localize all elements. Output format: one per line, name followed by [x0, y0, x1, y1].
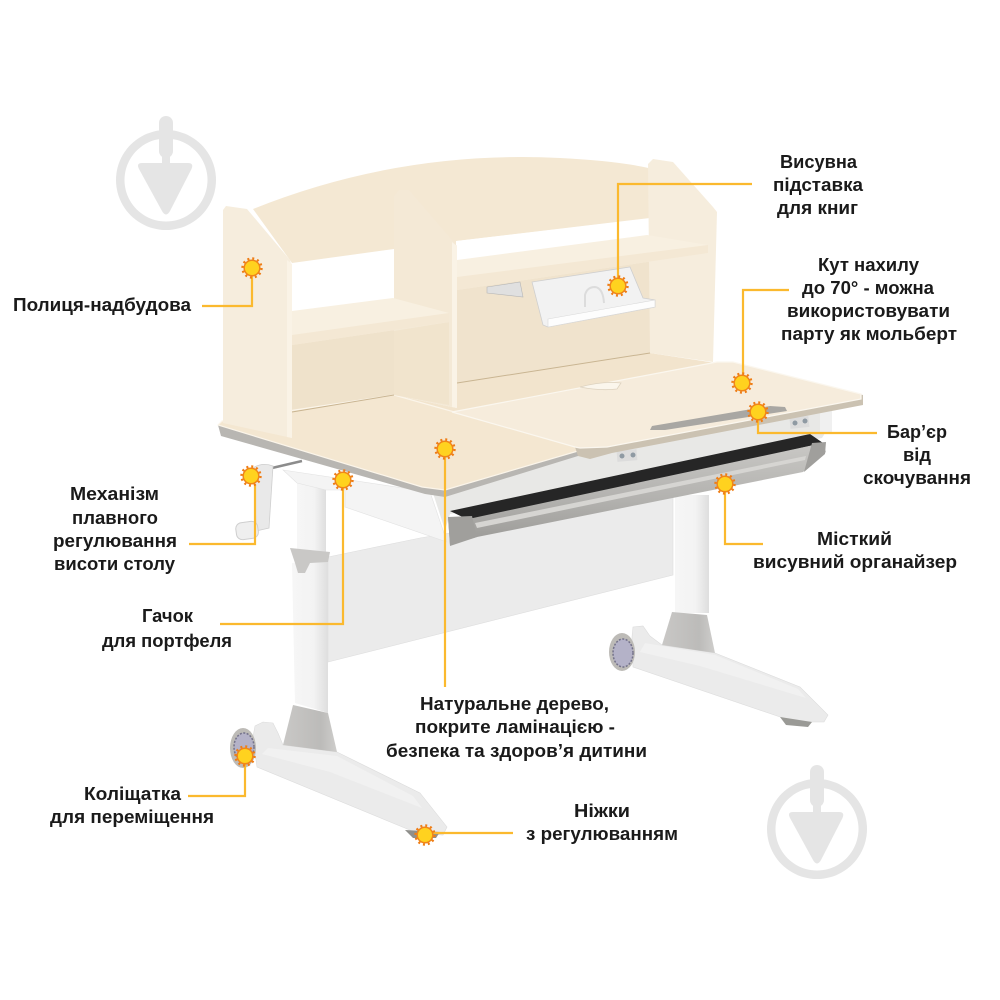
tilting board — [452, 362, 863, 459]
label: hook: для портфеля — [102, 630, 232, 651]
back gaps — [292, 249, 394, 311]
watermark: top left logo — [116, 116, 216, 230]
label: tilt angle: використовувати — [787, 300, 950, 321]
crank handle — [235, 461, 302, 540]
label: barrier — [863, 421, 971, 488]
markers — [236, 258, 768, 844]
left end panel — [223, 206, 292, 438]
desktop behind boards — [394, 353, 716, 412]
label: book stand: підставка — [773, 174, 864, 195]
label: height mechanism — [53, 483, 177, 574]
upper shelf — [457, 235, 708, 290]
left bay middle shelf — [292, 298, 449, 345]
label: natural wood — [386, 693, 647, 761]
label: book stand: Висувна — [780, 151, 858, 172]
label: organizer: Місткий — [817, 528, 892, 549]
under-desk brackets — [283, 410, 832, 542]
label: adjustable feet: з регулюванням — [526, 823, 678, 844]
label: adjustable feet: Ніжки — [574, 800, 630, 821]
label: natural wood: покрите ламінацією - — [415, 716, 615, 737]
label: natural wood: Натуральне дерево, — [420, 693, 609, 714]
label: height mechanism: Механізм — [70, 483, 159, 504]
leader lines — [188, 184, 877, 833]
label: shelf: Полиця-надбудова — [13, 294, 192, 315]
label: wheels: для переміщення — [50, 806, 214, 827]
label: height mechanism: висоти столу — [54, 553, 176, 574]
watermark: bottom right logo — [767, 765, 867, 879]
label: tilt angle: Кут нахилу — [818, 254, 920, 275]
label: organizer: висувний органайзер — [753, 551, 957, 572]
label: hook — [102, 605, 232, 651]
middle divider panel — [394, 190, 457, 408]
label: natural wood: безпека та здоров’я дитини — [386, 740, 647, 761]
right leg and foot — [609, 495, 828, 727]
label: height mechanism: плавного — [72, 507, 158, 528]
lower back panels — [292, 321, 394, 412]
book stand — [487, 267, 655, 327]
label: organizer — [753, 528, 957, 572]
shelf junction lines — [292, 353, 650, 412]
label: barrier: Бар’єр — [887, 421, 947, 442]
desk illustration — [218, 157, 863, 838]
left leg and foot — [230, 483, 447, 838]
label: tilt angle — [781, 254, 957, 344]
right end panel — [648, 159, 717, 362]
arched back panel — [253, 157, 653, 263]
label: tilt angle: парту як мольберт — [781, 323, 957, 344]
label: barrier: від — [903, 444, 931, 465]
label: wheels: Коліщатка — [84, 783, 182, 804]
label: book stand: для книг — [777, 197, 858, 218]
apron bolts — [617, 416, 809, 462]
label: book stand — [773, 151, 864, 218]
label: height mechanism: регулювання — [53, 530, 177, 551]
drawer organizer — [448, 434, 826, 546]
modesty crossbar panel — [328, 496, 673, 662]
label: hook: Гачок — [142, 605, 194, 626]
label: adjustable feet — [526, 800, 678, 844]
label: barrier: скочування — [863, 467, 971, 488]
label: wheels — [50, 783, 214, 827]
left desk board — [218, 395, 578, 497]
label: tilt angle: до 70° - можна — [802, 277, 935, 298]
anti-roll barrier — [650, 406, 787, 430]
